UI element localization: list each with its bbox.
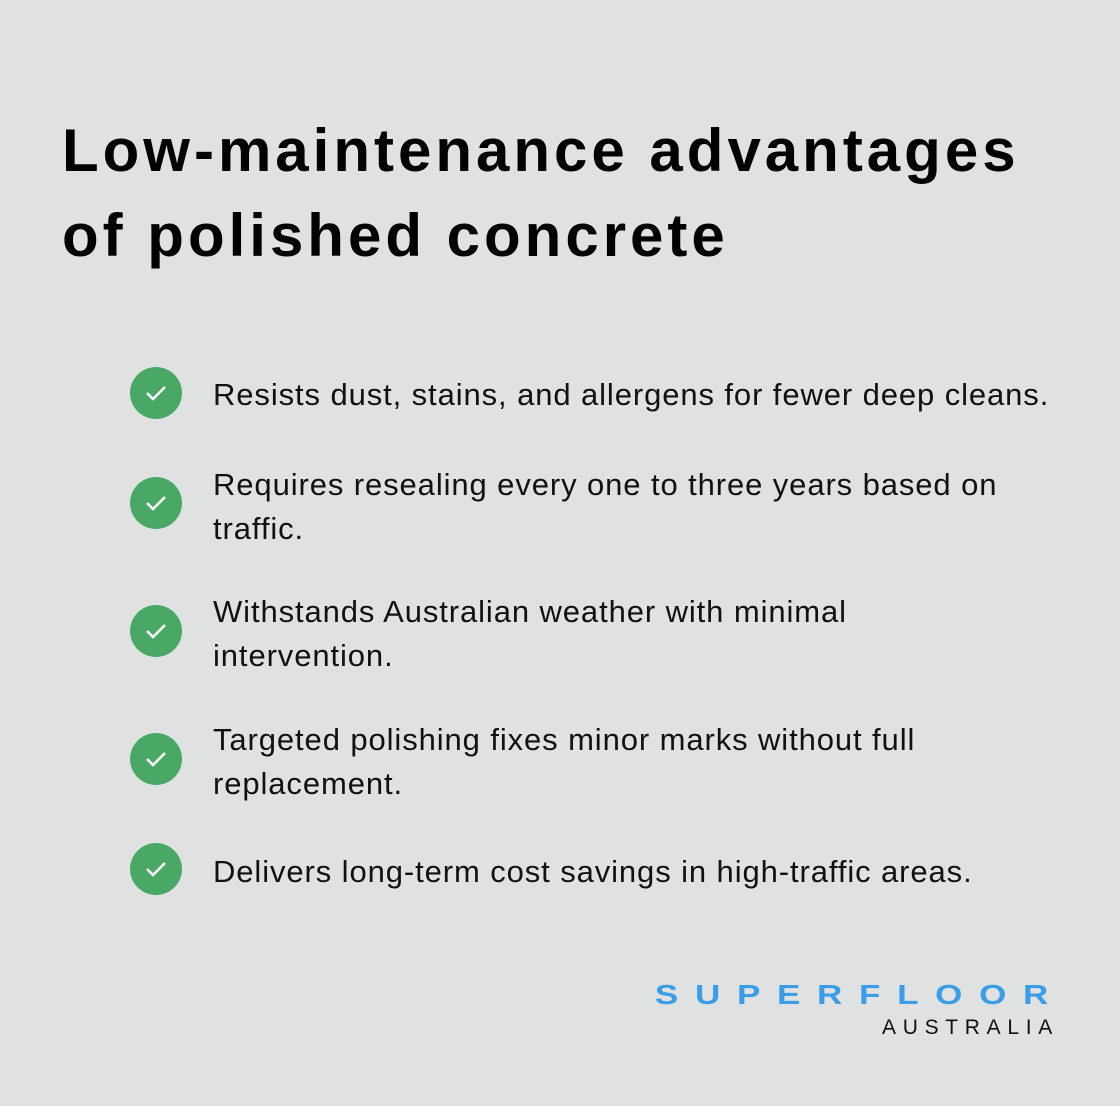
icon: check [130, 477, 182, 529]
icon: check [130, 733, 182, 785]
text: replacement. [213, 766, 403, 801]
text: Targeted polishing fixes minor marks without full [213, 722, 915, 757]
text: Delivers long-term cost savings in high-traffic areas. [213, 854, 973, 889]
text: Resists dust, stains, and allergens for fewer deep cleans. [213, 377, 1049, 412]
icon: check [130, 843, 182, 895]
text [213, 594, 847, 673]
logo: superfloor: SUPERFLOOR [655, 980, 1065, 1010]
item 2 [130, 467, 997, 546]
icon: check [130, 605, 182, 657]
item 3 [130, 594, 847, 673]
text: traffic. [213, 511, 304, 546]
item 5 [130, 843, 973, 895]
item 4 [130, 722, 915, 801]
title: Low-maintenance advantages [62, 117, 1020, 184]
text: intervention. [213, 638, 394, 673]
logo: australia: AUSTRALIA [882, 1016, 1059, 1039]
text: Withstands Australian weather with minimal [213, 594, 847, 629]
title [62, 117, 1020, 269]
title: of polished concrete [62, 202, 729, 269]
text [213, 722, 915, 801]
text: Requires resealing every one to three years based on [213, 467, 997, 502]
text [213, 467, 997, 546]
item 1 [130, 367, 1049, 419]
icon: check [130, 367, 182, 419]
logo [655, 980, 1065, 1039]
